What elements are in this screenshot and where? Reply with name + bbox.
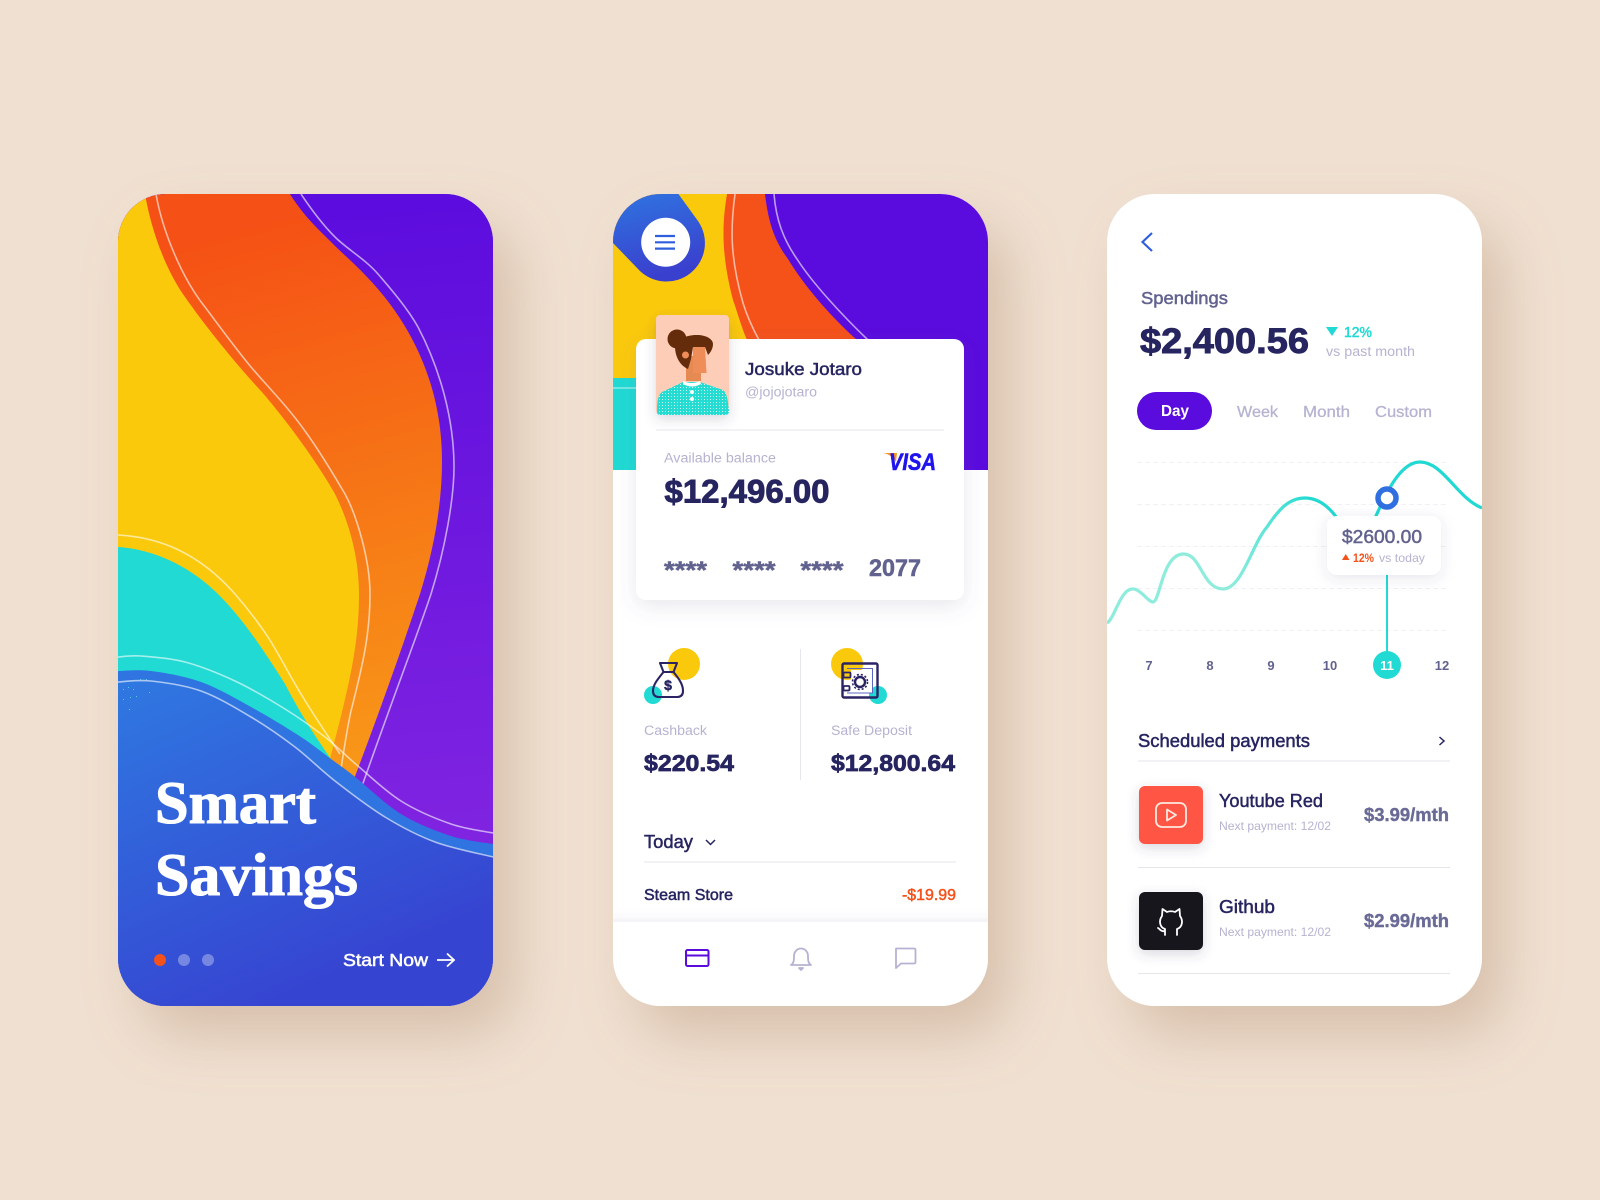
- card number: ****: [664, 557, 708, 584]
- trend indicator: [1326, 324, 1415, 359]
- title: Savings: [155, 842, 358, 908]
- visa logo: [883, 453, 935, 470]
- payment: Github: Github: [1219, 897, 1275, 917]
- period tabs: Custom: [1375, 404, 1432, 421]
- icon: bell: [791, 948, 811, 970]
- period tabs: Month: [1303, 404, 1350, 421]
- trend indicator: vs past month: [1326, 344, 1415, 359]
- call to action: Start Now: Start Now: [343, 950, 428, 970]
- stat: safe deposit: Safe Deposit: [831, 723, 912, 738]
- visa logo: VISA: [889, 449, 936, 476]
- tooltip: 12%: [1353, 553, 1374, 565]
- today dropdown: Today: [644, 831, 694, 852]
- stat: cashback: $220.54: [644, 750, 734, 776]
- period tabs: Day: [1161, 403, 1189, 420]
- x axis labels: 11: [1380, 658, 1394, 673]
- x axis labels: 7: [1145, 658, 1153, 673]
- icon: youtube: [1139, 786, 1203, 844]
- wave artwork: [118, 194, 493, 1006]
- card number: ****: [732, 557, 776, 584]
- icon: card: [686, 950, 708, 966]
- balance card: [636, 315, 964, 600]
- payment: Youtube Red: Youtube Red: [1219, 791, 1323, 811]
- header artwork: [613, 194, 988, 470]
- transaction: Steam Store: [644, 888, 956, 902]
- phone: Smart Savings onboarding: [118, 194, 493, 1006]
- tooltip: [1327, 516, 1441, 575]
- tooltip: vs today: [1379, 551, 1425, 565]
- card number: ****: [800, 557, 844, 584]
- avatar: [656, 315, 729, 415]
- line chart: [1107, 462, 1482, 679]
- payment: Youtube Red: $3.99/mth: [1364, 805, 1449, 825]
- title: Smart: [155, 770, 316, 836]
- stat: safe deposit: [831, 648, 955, 776]
- payment: Youtube Red: Next payment: 12/02: [1219, 819, 1331, 833]
- x axis labels: 10: [1323, 658, 1337, 673]
- available balance label: Available balance: [664, 450, 776, 466]
- period tabs: [1137, 392, 1432, 430]
- payment: Github: $2.99/mth: [1364, 911, 1449, 931]
- stat: cashback: Cashback: [644, 723, 707, 738]
- bottom navigation: [613, 920, 988, 1006]
- payment: Github: Next payment: 12/02: [1219, 925, 1331, 939]
- icon: back chevron: [1142, 233, 1152, 251]
- call to action: Start Now: [343, 950, 454, 970]
- x axis labels: 12: [1435, 658, 1449, 673]
- x axis labels: [1145, 651, 1449, 679]
- transaction: Steam Store: -$19.99: [902, 887, 956, 904]
- x axis labels: 9: [1267, 658, 1275, 673]
- phone: spendings: [1107, 194, 1482, 1006]
- stat: safe deposit: $12,800.64: [831, 750, 955, 776]
- trend indicator: 12%: [1344, 324, 1372, 341]
- scheduled payments heading: Scheduled payments: [1138, 731, 1310, 751]
- phone: account dashboard: [603, 192, 998, 1016]
- transaction: Steam Store: Steam Store: [644, 887, 733, 904]
- icon: chat: [896, 948, 916, 968]
- stat: cashback: [644, 648, 734, 776]
- icon: safe: [831, 648, 887, 704]
- tooltip: $2600.00: [1342, 527, 1422, 547]
- period tabs: Week: [1237, 404, 1279, 421]
- user name: Josuke Jotaro: [745, 359, 862, 379]
- pagination dots: [154, 954, 214, 966]
- card number: 2077: [869, 555, 921, 582]
- scheduled payments heading: [1138, 731, 1444, 751]
- user handle: @jojojotaro: [745, 384, 817, 400]
- today dropdown: [644, 834, 716, 852]
- spendings total: $2,400.56: [1140, 322, 1309, 361]
- icon: github: [1139, 892, 1203, 950]
- card number: [664, 559, 920, 576]
- menu button: [613, 192, 705, 282]
- balance amount: $12,496.00: [664, 474, 830, 510]
- payment: Github: [1139, 892, 1449, 950]
- x axis labels: 8: [1206, 658, 1214, 673]
- icon: money bag: $: [664, 677, 672, 693]
- spendings heading: Spendings: [1141, 288, 1228, 308]
- payment: Youtube Red: [1139, 786, 1449, 844]
- title: [155, 770, 358, 908]
